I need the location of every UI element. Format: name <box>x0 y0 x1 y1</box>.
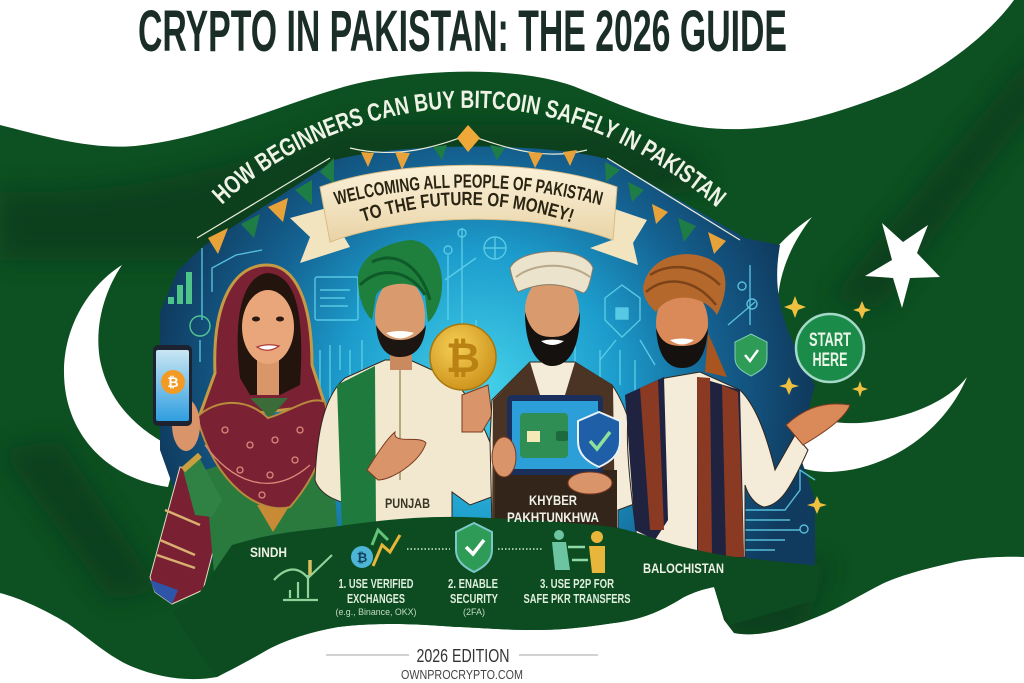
step 1 text <box>336 576 416 617</box>
icon: bitcoin coin: ₿ <box>446 334 480 381</box>
icon: exchange <box>351 530 400 568</box>
figure: Balochistan man <box>625 254 850 560</box>
region label: Sindh: SINDH <box>250 544 287 560</box>
start here button: HERE <box>812 350 848 371</box>
region label: Khyber Pakhtunkhwa: KHYBER <box>529 492 577 508</box>
bottom green band <box>172 517 820 677</box>
website: OWNPROCRYPTO.COM <box>401 667 523 682</box>
icon: security shield <box>456 523 492 572</box>
start here button: START <box>809 330 851 351</box>
region label: Punjab: PUNJAB <box>385 495 430 511</box>
banner line 1: WELCOMING ALL PEOPLE OF PAKISTAN <box>332 174 604 205</box>
region label: Khyber Pakhtunkhwa: PAKHTUNKHWA <box>507 509 599 525</box>
sparkles <box>779 296 871 514</box>
icon: P2P transfer <box>552 530 605 573</box>
icon: phone: ₿ <box>167 374 179 390</box>
figure: Punjab man <box>315 240 505 530</box>
figure: Khyber Pakhtunkhwa man <box>490 251 645 528</box>
step 3 text <box>524 576 631 606</box>
blue tech background <box>160 146 815 566</box>
step 2 text: SECURITY <box>450 591 498 606</box>
icon: exchange: ₿ <box>357 550 367 565</box>
welcome banner <box>290 164 647 265</box>
step 1 text: 1. USE VERIFIED <box>338 576 414 591</box>
step 3 text: SAFE PKR TRANSFERS <box>524 591 631 606</box>
icon: phone <box>153 345 200 451</box>
step 2 text: 2. ENABLE <box>448 576 498 591</box>
icon: small shield <box>735 334 767 376</box>
left crescent <box>64 265 178 487</box>
step 2 text: (2FA) <box>463 607 485 617</box>
bars icon <box>168 272 192 304</box>
dotted connectors <box>407 548 543 550</box>
circuit decorations <box>190 228 815 550</box>
upper crescent tip <box>757 217 812 318</box>
right crescent <box>770 377 967 472</box>
figure: Sindh woman <box>150 265 338 604</box>
step 1 text: EXCHANGES <box>347 591 405 606</box>
step 2 text <box>448 576 498 617</box>
region label: Khyber Pakhtunkhwa <box>507 492 599 525</box>
star <box>865 223 940 308</box>
icon: growth chart <box>274 555 332 600</box>
step 1 text: (e.g., Binance, OKX) <box>336 607 416 617</box>
icon: tablet with wallet and shield <box>492 395 620 494</box>
step 3 text: 3. USE P2P FOR <box>540 576 614 591</box>
edition text: 2026 EDITION <box>416 646 510 666</box>
region label: Balochistan: BALOCHISTAN <box>643 560 724 576</box>
arched subtitle: HOW BEGINNERS CAN BUY BITCOIN SAFELY IN PAKISTAN <box>211 90 727 207</box>
edition divider <box>326 654 598 656</box>
bunting <box>197 125 740 254</box>
banner line 2: TO THE FUTURE OF MONEY! <box>359 192 574 222</box>
icon: bitcoin coin <box>430 324 496 432</box>
start here button <box>796 314 864 382</box>
